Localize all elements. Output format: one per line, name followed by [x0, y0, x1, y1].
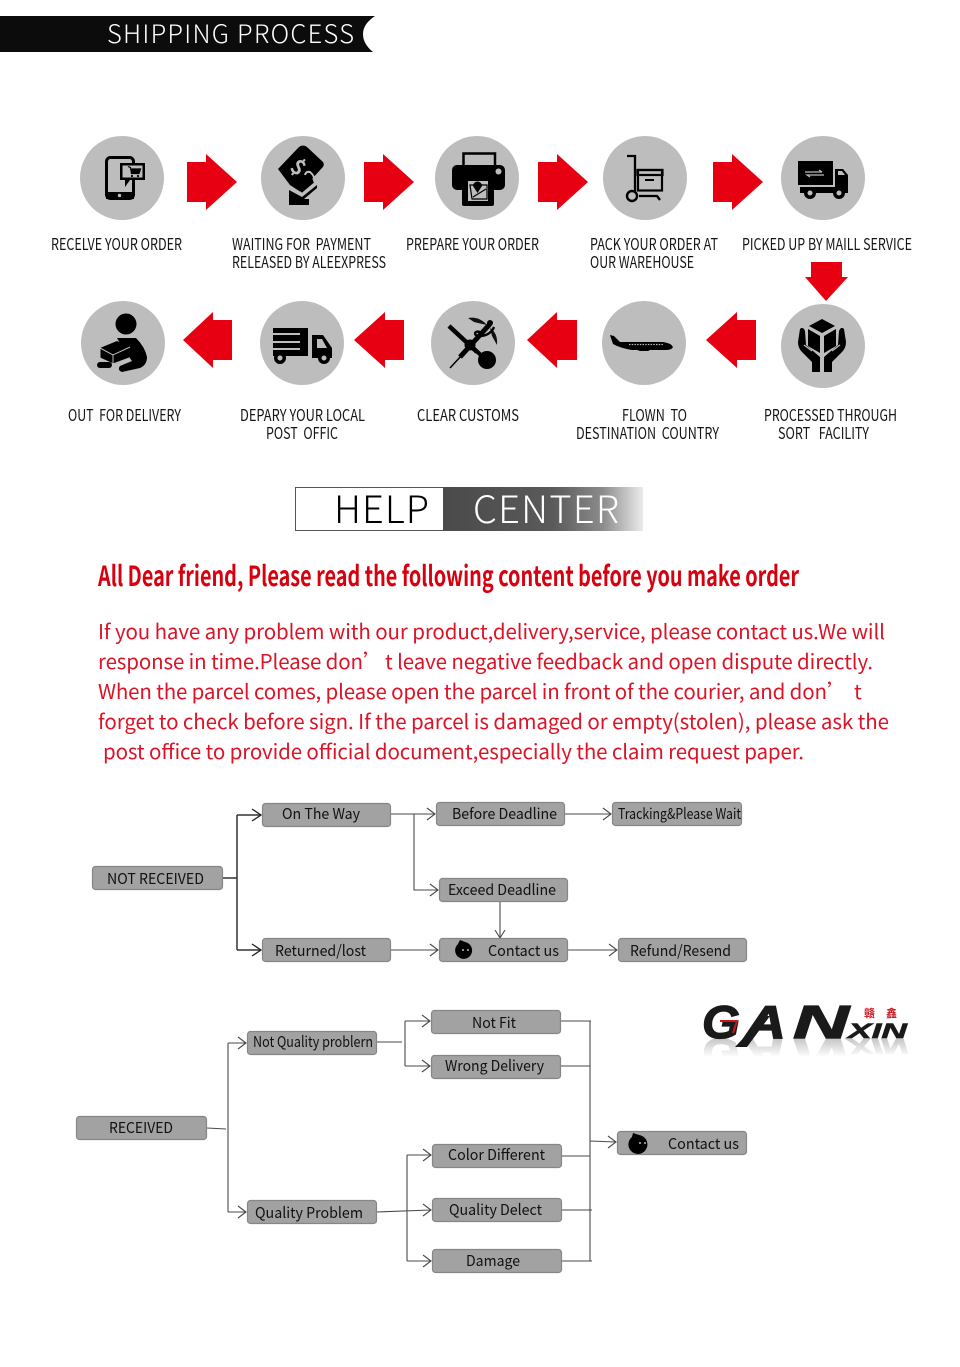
step: receive your order	[51, 136, 182, 255]
logo reflection: G	[702, 1029, 740, 1081]
notice paragraph: t	[854, 675, 862, 705]
logo reflection	[695, 1029, 915, 1086]
notice paragraph: post office to provide official document,especially the claim request paper.	[103, 735, 804, 765]
logo: ganxin: N	[793, 996, 850, 1048]
step: waiting for payment: WAITING FOR PAYMENT	[232, 231, 371, 255]
step: processed through sort facility: SORT FACILITY	[778, 420, 869, 444]
box: not fit	[432, 1010, 560, 1034]
notice paragraph: ’	[363, 645, 384, 675]
step: picked up by mail service	[742, 136, 912, 255]
heading: help center: HELP	[334, 479, 429, 534]
notice paragraph: forget to check before sign. If the parcel is damaged or empty(stolen), please ask the	[98, 705, 889, 735]
step: flown to destination country: FLOWN TO	[622, 402, 687, 426]
arrow: right 2	[364, 154, 414, 210]
box: contact us: Contact us	[488, 940, 559, 961]
header banner: shipping process	[0, 14, 375, 52]
arrow: left 3	[354, 312, 404, 368]
logo: ganxin: A	[744, 996, 786, 1048]
box: contact us	[440, 938, 568, 962]
logo reflection: A	[744, 1029, 786, 1081]
arrow: right 3	[538, 154, 588, 210]
box: before deadline: Before Deadline	[452, 803, 557, 824]
step: depart local post office: POST OFFIC	[266, 420, 338, 444]
box: not received: NOT RECEIVED	[107, 868, 204, 889]
flowchart: not received	[92, 802, 746, 962]
box: damage: Damage	[466, 1250, 520, 1271]
step: prepare your order: PREPARE YOUR ORDER	[406, 231, 539, 255]
step: out for delivery	[68, 301, 181, 426]
step: clear customs: CLEAR CUSTOMS	[417, 402, 519, 426]
step: pack your order: OUR WAREHOUSE	[590, 249, 694, 273]
step: depart local post office	[240, 301, 365, 444]
step: waiting for payment: RELEASED BY ALEEXPRESS	[232, 249, 386, 273]
step: out for delivery: OUT FOR DELIVERY	[68, 402, 181, 426]
box: quality delect	[432, 1198, 562, 1222]
box: tracking: Tracking&Please Wait	[618, 803, 741, 824]
notice paragraph: response in time.Please don	[98, 645, 363, 675]
logo reflection: N	[793, 1029, 850, 1081]
box: returned/lost	[262, 938, 390, 962]
step: flown to destination country: DESTINATION COUNTRY	[576, 420, 719, 444]
logo: ganxin	[695, 996, 915, 1086]
step: depart local post office: DEPARY YOUR LOCAL	[240, 402, 365, 426]
box: received: RECEIVED	[109, 1117, 173, 1138]
box: wrong delivery: Wrong Delivery	[445, 1055, 544, 1076]
connector lines: not received	[223, 808, 617, 956]
box: not quality problem: Not Quality problern	[253, 1031, 373, 1052]
box: on the way: On The Way	[282, 803, 360, 824]
step: prepare your order	[406, 136, 539, 255]
step: picked up by mail service: PICKED UP BY MAILL SERVICE	[742, 231, 912, 255]
connector lines: received	[207, 1015, 616, 1267]
logo: ganxin: 赣鑫	[864, 1005, 897, 1021]
step: processed through sort facility	[764, 304, 897, 444]
notice paragraph: When the parcel comes, please open the parcel in front of the courier, and don	[98, 675, 827, 705]
logo: ganxin: XIN	[846, 1020, 908, 1043]
heading: help center: CENTER	[473, 479, 619, 534]
arrow: left 4	[183, 312, 232, 368]
step: processed through sort facility: PROCESSED THROUGH	[764, 402, 897, 426]
step: receive your order: RECELVE YOUR ORDER	[51, 231, 182, 255]
logo: ganxin: G	[702, 996, 740, 1048]
step: pack your order	[590, 136, 718, 273]
arrow: down	[805, 262, 848, 301]
box: returned/lost: Returned/lost	[275, 940, 366, 961]
notice paragraph	[98, 615, 889, 765]
box: color different: Color Different	[448, 1144, 545, 1165]
box: on the way	[262, 803, 390, 826]
header banner: shipping process: SHIPPING PROCESS	[107, 14, 354, 51]
notice paragraph: t leave negative feedback and open dispute directly.	[385, 645, 873, 675]
notice paragraph: If you have any problem with our product,delivery,service, please contact us.We will	[98, 615, 885, 645]
arrow: left 1	[706, 312, 756, 368]
arrow: right 1	[187, 154, 237, 210]
box: quality delect: Quality Delect	[449, 1199, 542, 1220]
box: refund/resend: Refund/Resend	[630, 940, 731, 961]
step: pack your order: PACK YOUR ORDER AT	[590, 231, 718, 255]
box: contact us	[618, 1132, 746, 1154]
arrow: right 4	[713, 154, 763, 210]
flowchart: received	[76, 1010, 746, 1272]
step: flown to destination country	[576, 301, 719, 444]
step: waiting for payment	[232, 136, 386, 273]
box: quality problem: Quality Problem	[255, 1202, 363, 1223]
notice paragraph: ’	[827, 675, 848, 705]
step: waiting for payment: $	[284, 151, 313, 182]
box: received	[76, 1116, 206, 1140]
box: contact us: Contact us	[668, 1133, 739, 1154]
arrow: left 2	[527, 312, 577, 368]
heading: help center	[296, 479, 643, 534]
logo reflection: XIN	[846, 1034, 908, 1057]
box: not fit: Not Fit	[472, 1012, 516, 1033]
box: exceed deadline: Exceed Deadline	[448, 879, 556, 900]
step: clear customs	[417, 301, 519, 426]
box: damage	[432, 1250, 562, 1272]
